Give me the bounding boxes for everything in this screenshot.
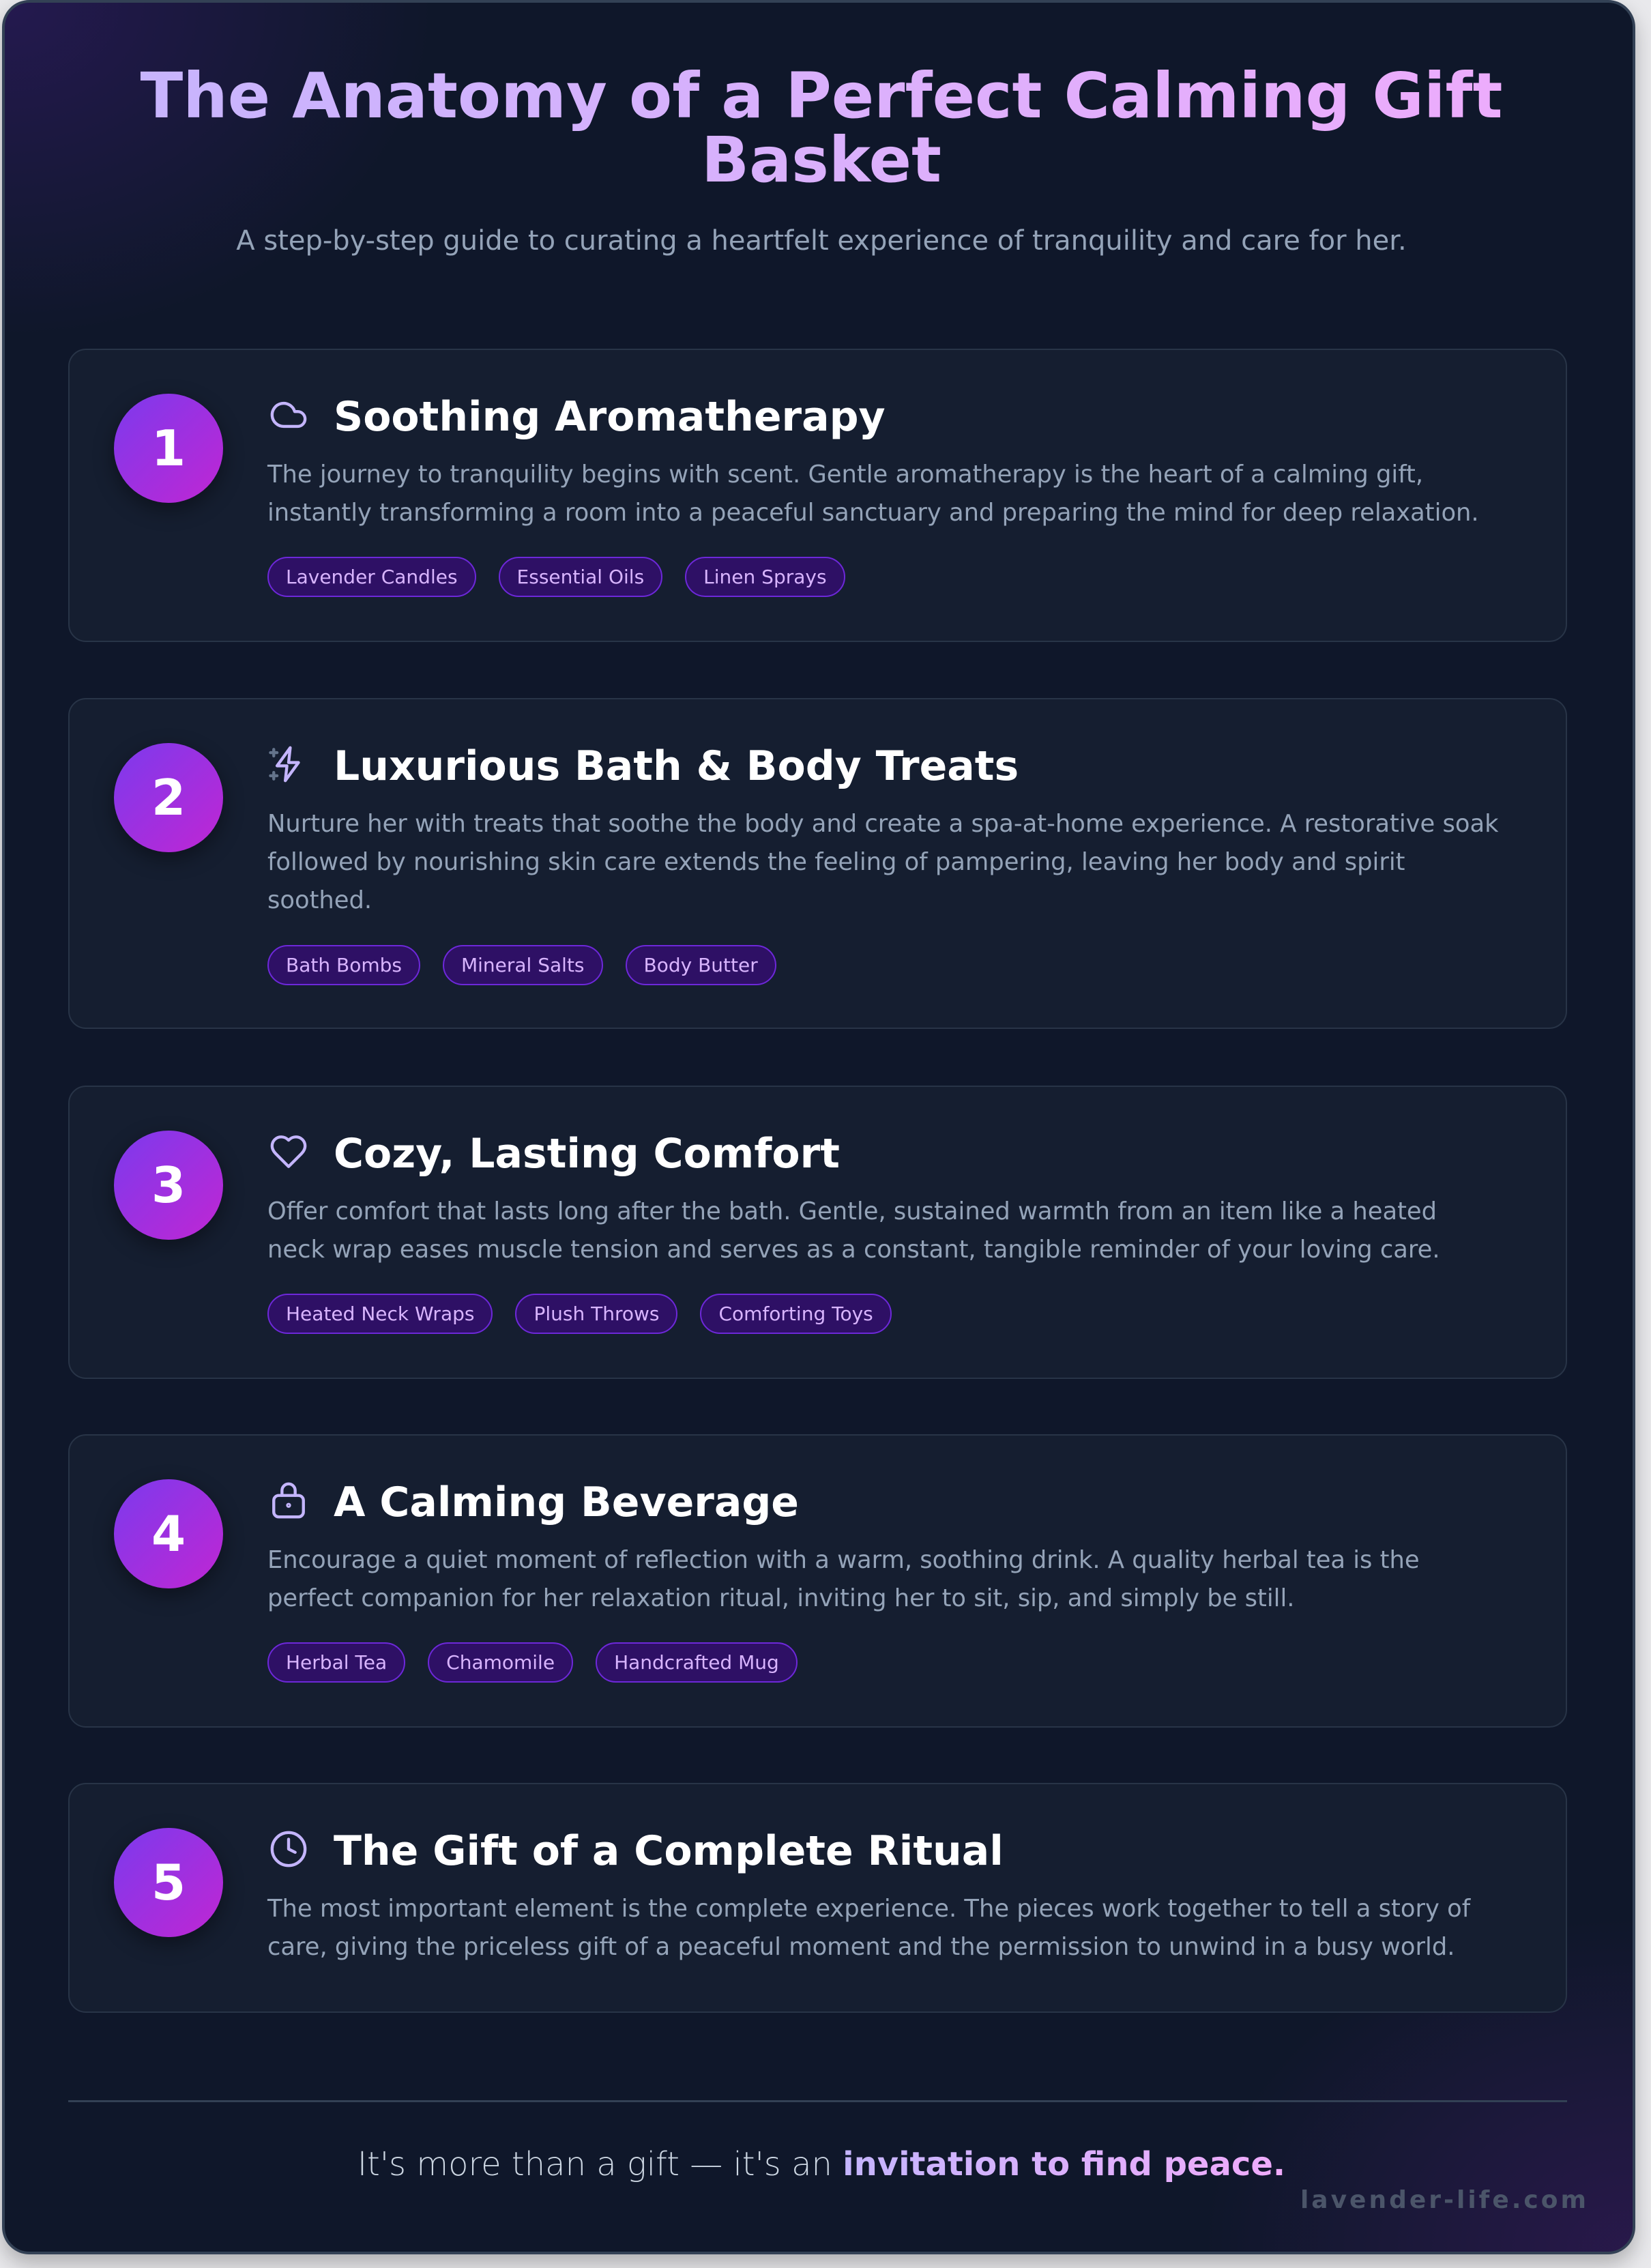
tags: Body Butter bbox=[644, 954, 758, 976]
text: The journey to tranquility begins with scent. Gentle aromatherapy is the heart of a calming gift, bbox=[267, 461, 1423, 489]
icon: bag bbox=[272, 1482, 305, 1519]
icon: heart bbox=[270, 1135, 307, 1168]
text: The most important element is the complete experience. The pieces work together to tell a story of bbox=[267, 1895, 1470, 1923]
tags bbox=[267, 1642, 798, 1683]
panel: step 2 bbox=[68, 698, 1567, 1029]
text bbox=[267, 1895, 1471, 1961]
tags: Essential Oils bbox=[517, 566, 644, 588]
icon: sparkle bolt bbox=[269, 746, 300, 782]
tags: Chamomile bbox=[446, 1651, 555, 1674]
tags bbox=[267, 557, 845, 597]
text bbox=[267, 461, 1479, 527]
heading: Cozy, Lasting Comfort bbox=[334, 1130, 840, 1178]
panel: step 4 bbox=[68, 1434, 1567, 1728]
tags: Comforting Toys bbox=[718, 1303, 873, 1325]
number 3 bbox=[114, 1131, 223, 1240]
tags: Bath Bombs bbox=[286, 954, 402, 976]
number 2: 2 bbox=[151, 769, 186, 826]
number 1 bbox=[114, 394, 223, 503]
tags: Lavender Candles bbox=[286, 566, 458, 588]
text: Encourage a quiet moment of reflection with a warm, soothing drink. A quality herbal tea is the bbox=[267, 1546, 1420, 1574]
text: perfect companion for her relaxation ritual, inviting her to sit, sip, and simply be still. bbox=[267, 1584, 1294, 1612]
heading: The Gift of a Complete Ritual bbox=[334, 1827, 1004, 1875]
panel: step 1 bbox=[68, 349, 1567, 642]
title: The Anatomy of a Perfect Calming Gift bbox=[140, 59, 1502, 132]
heading: Soothing Aromatherapy bbox=[334, 393, 886, 441]
subtitle: A step-by-step guide to curating a heartfelt experience of tranquility and care for her. bbox=[236, 225, 1407, 257]
title: Basket bbox=[701, 123, 941, 197]
footer tagline: It's more than a gift — it's an invitation to find peace. bbox=[357, 2145, 1285, 2183]
domain: lavender-life.com bbox=[1300, 2186, 1589, 2214]
tags bbox=[267, 1294, 892, 1334]
text: followed by nourishing skin care extends the feeling of pampering, leaving her body and spirit bbox=[267, 848, 1405, 876]
text: instantly transforming a room into a peaceful sanctuary and preparing the mind for deep relaxation. bbox=[267, 499, 1479, 527]
tags: Mineral Salts bbox=[461, 954, 585, 976]
text: Nurture her with treats that soothe the body and create a spa-at-home experience. A restorative soak bbox=[267, 810, 1499, 838]
panel: step 3 bbox=[68, 1086, 1567, 1379]
icon: clock bbox=[270, 1831, 307, 1867]
number 4: 4 bbox=[151, 1505, 186, 1562]
tags: Linen Sprays bbox=[703, 566, 827, 588]
tags: Heated Neck Wraps bbox=[286, 1303, 474, 1325]
number 5 bbox=[114, 1828, 223, 1937]
number 3: 3 bbox=[151, 1157, 186, 1214]
text: soothed. bbox=[267, 886, 372, 914]
heading: Luxurious Bath & Body Treats bbox=[334, 742, 1019, 790]
icon: cloud bbox=[270, 401, 307, 428]
panel: step 5 bbox=[68, 1783, 1567, 2013]
number 5: 5 bbox=[151, 1854, 186, 1911]
text bbox=[267, 810, 1499, 914]
number 1: 1 bbox=[151, 420, 186, 477]
text bbox=[267, 1197, 1440, 1264]
text bbox=[267, 1546, 1420, 1612]
text: Offer comfort that lasts long after the bath. Gentle, sustained warmth from an item like a heated bbox=[267, 1197, 1437, 1225]
title bbox=[5, 64, 1638, 192]
heading: A Calming Beverage bbox=[334, 1479, 799, 1526]
number 4 bbox=[114, 1479, 223, 1588]
tags: Plush Throws bbox=[534, 1303, 659, 1325]
tags bbox=[267, 945, 776, 985]
tags: Handcrafted Mug bbox=[614, 1651, 779, 1674]
text: care, giving the priceless gift of a peaceful moment and the permission to unwind in a busy world. bbox=[267, 1933, 1455, 1961]
number 2 bbox=[114, 743, 223, 852]
tags: Herbal Tea bbox=[286, 1651, 387, 1674]
text: neck wrap eases muscle tension and serves as a constant, tangible reminder of your loving care. bbox=[267, 1236, 1440, 1264]
